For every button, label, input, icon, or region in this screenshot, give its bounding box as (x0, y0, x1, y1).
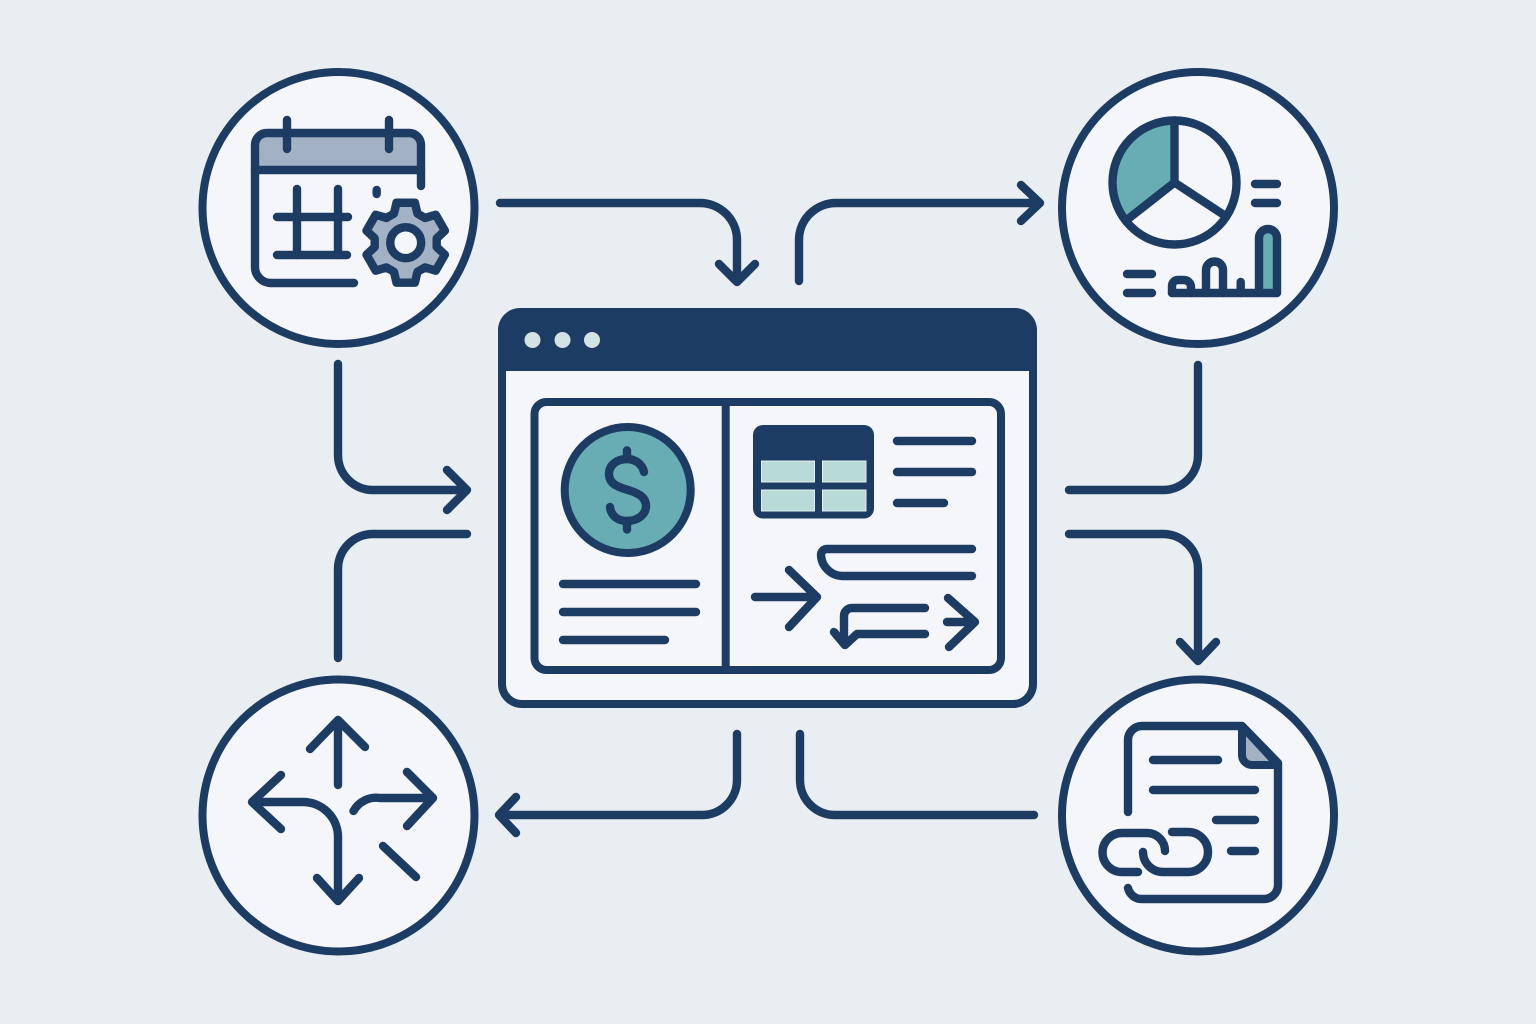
icon: curved flow line (821, 549, 972, 576)
window title bar (498, 308, 1037, 371)
circle: routing badge (202, 680, 474, 952)
circle: analytics badge (1062, 72, 1334, 344)
panel: linked document (1062, 680, 1334, 952)
icon: flow arrow (755, 570, 817, 627)
icon: gear (366, 203, 445, 283)
icon: document outline (1128, 726, 1278, 899)
arrow: dashboard to routing (499, 734, 737, 833)
text lines: left column (563, 584, 696, 640)
arrow: document to dashboard (800, 734, 1034, 815)
arrow: pie chart to dashboard (1069, 365, 1198, 490)
text lines: pie legend (1255, 184, 1277, 203)
icon: left and down arrow (252, 775, 359, 901)
arrow: dashboard to pie chart (799, 185, 1040, 281)
icon: calendar frame (255, 120, 421, 283)
icon: return arrow (834, 608, 925, 645)
text lines: bar legend (1127, 274, 1152, 293)
chart: pie (1112, 120, 1236, 244)
window frame (502, 312, 1033, 704)
chart: bars (1172, 229, 1277, 293)
icon: calendar grid (277, 189, 348, 255)
circle: calendar badge (202, 72, 474, 344)
panel: routing arrows (202, 680, 474, 952)
icon: calendar header (255, 133, 421, 170)
text lines: document (1153, 760, 1255, 851)
arrow: dashboard to document (1069, 534, 1216, 661)
icon: chain link (1102, 832, 1208, 872)
text lines: right column (897, 441, 972, 503)
arrow: calendar to dashboard left side (338, 364, 467, 510)
table (753, 425, 874, 518)
circle: document badge (1062, 680, 1334, 952)
icon: up arrow (310, 720, 365, 785)
icon: dollar coin (565, 427, 691, 553)
panel: central dashboard window (498, 308, 1037, 704)
icon: diagonal stroke (383, 846, 416, 877)
panel: calendar with gear (202, 72, 474, 344)
window control dots (524, 332, 600, 348)
arrow: routing to dashboard left side (338, 534, 467, 658)
icon: right arrow (354, 772, 433, 826)
panel: analytics charts (1062, 72, 1334, 344)
inner content panel (534, 402, 1001, 670)
icon: folded corner (1242, 726, 1278, 765)
icon: small forward arrow (947, 598, 975, 647)
arrow: calendar to dashboard (500, 203, 755, 282)
